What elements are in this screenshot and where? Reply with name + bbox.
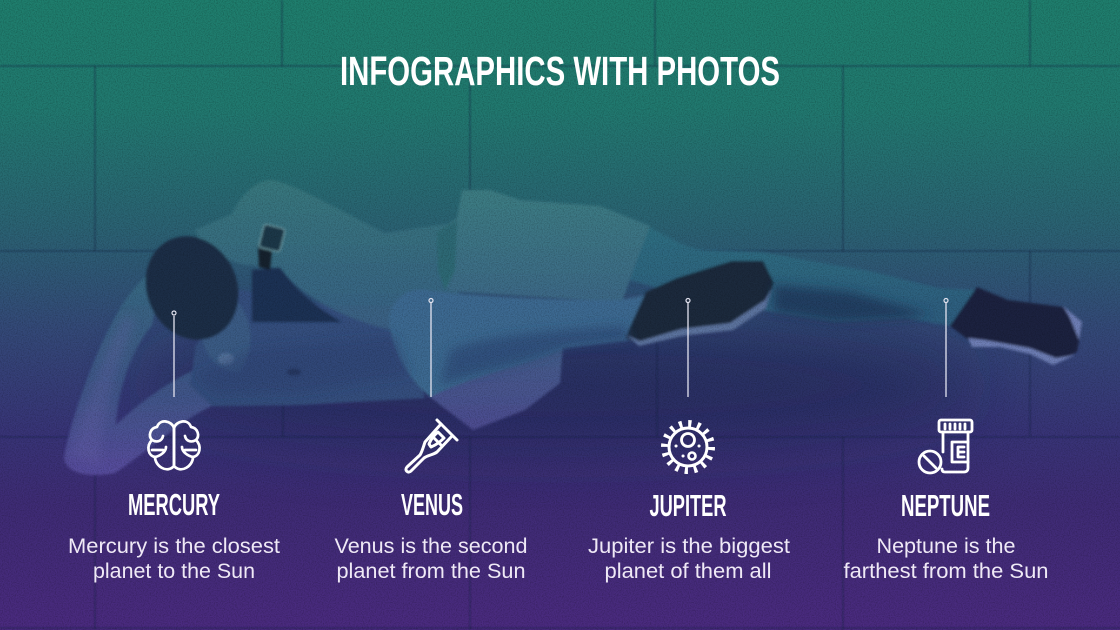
ground shadow around figure xyxy=(140,323,980,447)
description: Neptune xyxy=(844,535,1048,583)
description: Jupiter xyxy=(588,535,790,583)
forearm highlight xyxy=(72,315,135,465)
torso xyxy=(190,290,425,406)
shorts lower xyxy=(420,340,563,430)
straight leg xyxy=(630,224,980,326)
column: Mercury xyxy=(68,311,280,583)
waistband xyxy=(437,220,457,290)
dark chest shadow xyxy=(252,268,342,322)
column: Venus xyxy=(334,298,528,583)
face xyxy=(200,300,250,372)
pointer line: Venus xyxy=(429,298,433,397)
raised arm and forearm behind head xyxy=(64,262,425,475)
pointer line: Neptune xyxy=(944,298,948,397)
shoe one sole xyxy=(626,288,772,346)
icon: pill bottle xyxy=(919,420,972,473)
icon: crutch xyxy=(406,420,457,472)
knee shading xyxy=(440,326,630,385)
description: Jupiter: Jupiter is the biggest xyxy=(588,535,790,558)
photo: man lying on the ground xyxy=(64,180,1082,475)
shorts upper xyxy=(437,190,650,302)
heading: Mercury: MERCURY xyxy=(128,487,220,522)
icon: brain xyxy=(148,421,200,469)
soft body shading xyxy=(72,285,930,465)
column: Neptune xyxy=(844,298,1048,583)
column: Jupiter xyxy=(588,298,790,583)
shoe one xyxy=(625,261,774,344)
calf shadow xyxy=(774,285,930,322)
heading: Jupiter: JUPITER xyxy=(650,488,726,523)
description: Neptune: Neptune is the xyxy=(876,535,1016,558)
description: Jupiter: planet of them all xyxy=(604,560,772,583)
description: Mercury: Mercury is the closest xyxy=(68,535,280,558)
icon: virus xyxy=(664,424,712,470)
hair xyxy=(129,221,255,355)
shoe two sole xyxy=(968,306,1082,365)
description: Neptune: farthest from the Sun xyxy=(844,560,1048,583)
crisp dark details xyxy=(252,220,457,376)
title: INFOGRAPHICS WITH PHOTOS xyxy=(340,48,780,94)
description: Venus xyxy=(334,535,528,583)
description: Venus: Venus is the second xyxy=(334,535,528,558)
watch xyxy=(258,224,286,270)
upper arm and shoulder xyxy=(195,180,460,330)
heading: Neptune: NEPTUNE xyxy=(901,488,990,523)
shoe two xyxy=(950,287,1082,364)
description: Mercury: planet to the Sun xyxy=(93,560,255,583)
torso shading xyxy=(195,336,410,394)
navel xyxy=(287,368,301,376)
description: Venus: planet from the Sun xyxy=(336,560,526,583)
description: Mercury xyxy=(68,535,280,583)
pointer line: Jupiter xyxy=(686,298,690,397)
bent thigh and lower leg xyxy=(389,290,668,397)
heading: Venus: VENUS xyxy=(401,487,463,522)
nose xyxy=(218,353,234,365)
pointer line: Mercury xyxy=(172,311,176,397)
